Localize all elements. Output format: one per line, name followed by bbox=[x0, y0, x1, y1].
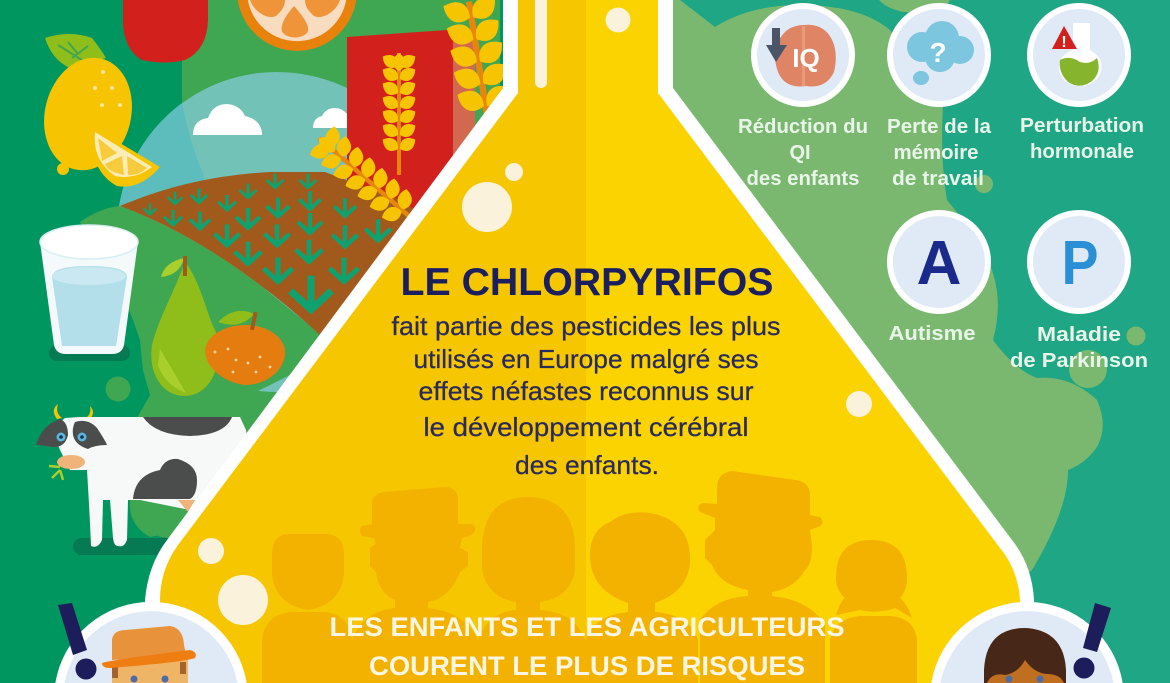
icon: letter A: A bbox=[917, 229, 961, 298]
farmer badge bbox=[55, 602, 247, 683]
right green blob bbox=[660, 0, 1103, 600]
silhouettes bbox=[262, 471, 917, 683]
seedlings bbox=[143, 174, 391, 310]
label: QI: des enfants bbox=[746, 168, 860, 190]
label: QI bbox=[738, 116, 868, 190]
child silhouette 3 bbox=[585, 512, 698, 683]
icon: brain IQ: IQ bbox=[792, 43, 820, 73]
label: hormones: Perturbation bbox=[1020, 115, 1144, 137]
icon: letter P bbox=[1027, 210, 1131, 314]
flask liquid left half bbox=[160, 0, 586, 683]
icon: cloud 1 bbox=[193, 104, 262, 135]
icon: tangerine bbox=[205, 311, 285, 385]
flask outline bbox=[145, 0, 1034, 683]
label: memory: Perte de la bbox=[887, 116, 992, 138]
description text: effets néfastes reconnus sur bbox=[418, 376, 754, 406]
description text bbox=[392, 311, 780, 480]
description text: fait partie des pesticides les plus bbox=[392, 311, 780, 341]
label: memory: de travail bbox=[892, 168, 984, 190]
icon: cow bbox=[36, 404, 250, 555]
description text: des enfants. bbox=[515, 450, 659, 480]
icon: apple bbox=[123, 0, 208, 62]
label: memory bbox=[887, 116, 992, 190]
girl silhouette bbox=[830, 540, 917, 683]
label: hormones: hormonale bbox=[1030, 141, 1134, 163]
background left bbox=[0, 0, 590, 683]
description text: utilisés en Europe malgré ses bbox=[414, 344, 758, 374]
sky circle bbox=[119, 72, 347, 392]
effect labels bbox=[738, 115, 1148, 372]
farmer silhouette 1 bbox=[352, 487, 478, 683]
child silhouette 2 bbox=[478, 497, 585, 683]
label: Parkinson: de Parkinson bbox=[1010, 350, 1148, 372]
icon: wheat large bbox=[437, 0, 523, 152]
field bbox=[120, 172, 460, 345]
flask liquid right half bbox=[586, 0, 1020, 683]
icon: thought bubble: ? bbox=[929, 37, 947, 68]
left green blob bbox=[80, 0, 500, 537]
label: autism: Autisme bbox=[888, 323, 976, 345]
icon: letter P: P bbox=[1062, 229, 1098, 298]
icon: lemon wedge bbox=[92, 127, 160, 187]
icon: wheat in barn bbox=[379, 51, 419, 175]
icon: brain IQ bbox=[751, 3, 855, 107]
top right small blob bbox=[879, 0, 950, 13]
icon: orange slice bbox=[238, 0, 356, 51]
label: memory: mémoire bbox=[894, 142, 978, 164]
green hill bbox=[80, 206, 340, 420]
icon: glass bbox=[40, 225, 138, 361]
title: LE CHLORPYRIFOS bbox=[400, 261, 774, 304]
label: QI: Réduction du bbox=[738, 116, 868, 138]
barn bbox=[347, 30, 475, 230]
icon: pear bbox=[151, 256, 219, 396]
small green bubble bbox=[106, 376, 130, 402]
icon: hormone flask: ! bbox=[1061, 34, 1067, 51]
icon: lemon bbox=[32, 34, 160, 187]
label: QI: QI bbox=[789, 142, 811, 164]
description text: le développement cérébral bbox=[424, 412, 748, 442]
farmer silhouette 2 bbox=[698, 471, 825, 683]
bubbles bbox=[198, 0, 872, 625]
label: hormones bbox=[1020, 115, 1144, 163]
child silhouette 1 bbox=[262, 534, 352, 683]
decorative circles right bbox=[975, 175, 1146, 388]
icon: wheat lower bbox=[303, 120, 440, 247]
icon: thought bubble bbox=[887, 3, 991, 107]
icon: letter A bbox=[887, 210, 991, 314]
icon: cloud 2 bbox=[313, 108, 347, 128]
risk text bbox=[330, 612, 844, 681]
risk text: COURENT LE PLUS DE RISQUES bbox=[369, 651, 805, 681]
label: Parkinson bbox=[1010, 324, 1148, 372]
risk text: LES ENFANTS ET LES AGRICULTEURS bbox=[330, 612, 844, 642]
child badge bbox=[931, 602, 1123, 683]
background right bbox=[590, 0, 1170, 683]
label: Parkinson: Maladie bbox=[1037, 324, 1121, 346]
icon: hormone flask bbox=[1027, 3, 1131, 107]
